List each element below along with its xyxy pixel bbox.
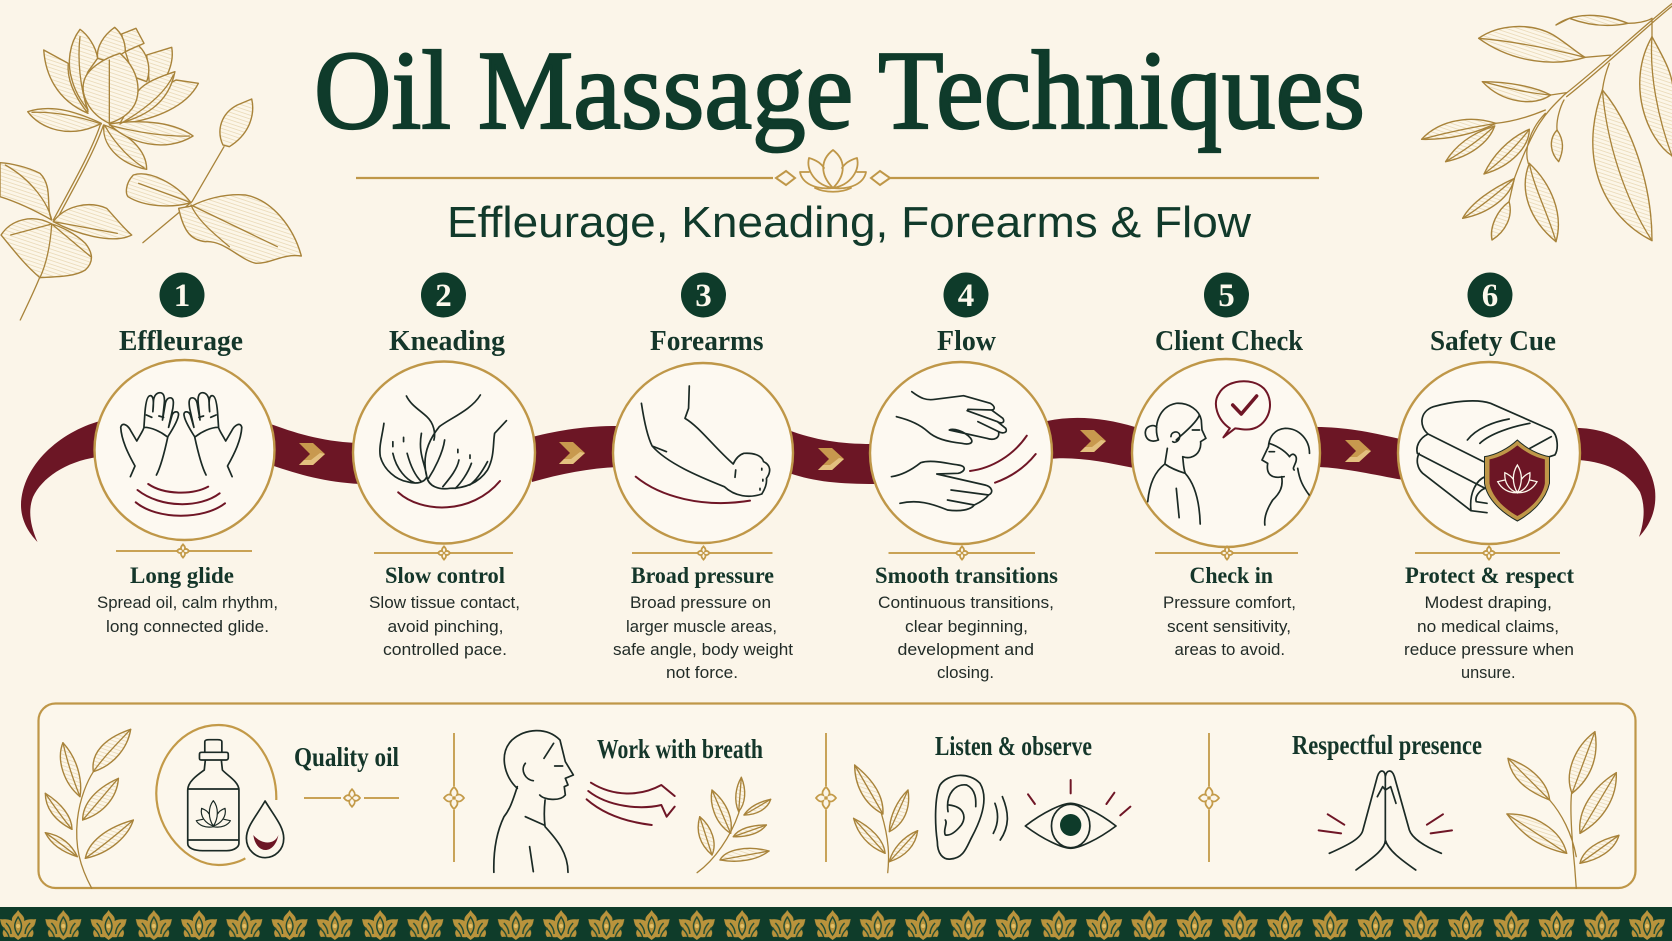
description: clear beginning, [905,617,1028,636]
heading: Kneading [389,326,505,357]
number badge 1: 1 [174,278,190,314]
step 6: Safety Cue [1398,272,1580,682]
icon: left sprig [45,729,133,888]
heading: Flow [937,326,997,357]
subheading: Check in [1190,563,1273,588]
description: safe angle, body weight [613,640,793,659]
icon: forearm and fist [636,386,770,503]
ribbon chevron arrows [299,430,1371,470]
number badge 3: 3 [695,278,712,314]
description: Slow tissue contact, [369,593,520,612]
subheading: Broad pressure [631,563,774,588]
icon: right sprig [1507,732,1619,888]
description [613,593,793,682]
decoration: lotus illustration [0,27,301,320]
description [878,593,1054,682]
divider [632,546,772,560]
circle [94,360,274,540]
icon: sprig [697,777,771,873]
description: closing. [937,663,994,682]
icon: ear and eye [936,775,1130,859]
description: larger muscle areas, [626,617,777,636]
heading: Forearms [650,326,764,357]
step 2: Kneading [353,272,535,659]
subheading: Smooth transitions [875,563,1058,588]
number badge 6: 6 [1482,278,1498,314]
circle [870,362,1052,544]
icon: towels and shield [1417,401,1557,521]
description: no medical claims, [1417,617,1559,636]
description: long connected glide. [106,617,269,636]
description [1404,593,1574,682]
step 4: Flow [870,272,1058,682]
description: Pressure comfort, [1163,593,1296,612]
number badge 6 [1468,272,1512,318]
icon: sprig [854,765,918,873]
description [1163,593,1296,659]
number badge 2 [421,272,466,318]
decoration: leafy branch [1422,3,1672,242]
icon: oil bottle and drop [156,725,284,865]
step 5: Client Check [1132,272,1320,659]
subheading: Long glide [130,563,234,588]
ribbon connecting the steps [21,418,1655,542]
title: Oil Massage Techniques [314,29,1365,153]
icon: praying hands [1319,771,1452,870]
description: avoid pinching, [388,617,504,636]
divider [1415,546,1560,560]
footer ornamental band [0,907,1672,941]
icon: two people and check bubble [1145,381,1309,525]
title divider with lotus [356,150,1319,192]
number badge 4: 4 [958,278,974,314]
label: listen and observe: Listen & observe [935,731,1092,761]
number badge 2: 2 [435,278,452,314]
subtitle: Effleurage, Kneading, Forearms & Flow [447,198,1251,247]
label: respectful presence: Respectful presence [1292,730,1482,760]
description: Continuous transitions, [878,593,1054,612]
divider [1155,546,1298,560]
description: reduce pressure when [1404,640,1574,659]
label: quality oil: Quality oil [294,742,399,772]
icon: flowing hands [891,392,1036,511]
number badge 1 [160,272,204,318]
step 3: Forearms [613,272,793,682]
circle [353,362,535,544]
description [97,593,278,636]
description: development and [898,640,1034,659]
number badge 4 [944,272,988,318]
circle [1132,359,1320,547]
description: Modest draping, [1424,593,1552,612]
description: areas to avoid. [1174,640,1285,659]
panel: practice tips [38,704,1636,888]
circle [613,363,793,543]
icon: person breathing [494,731,675,872]
description [369,593,520,659]
divider [888,546,1035,560]
separators [444,733,1219,862]
description: Broad pressure on [630,593,771,612]
heading: Effleurage [119,326,243,357]
small divider [304,789,399,807]
subheading: Protect & respect [1405,563,1574,588]
divider [374,546,513,560]
number badge 3 [681,272,726,318]
description: scent sensitivity, [1167,617,1291,636]
divider [116,544,252,558]
number badge 5: 5 [1218,278,1235,314]
heading: Safety Cue [1430,326,1556,357]
icon: open hands [121,393,242,516]
description: controlled pace. [383,640,507,659]
heading: Client Check [1155,326,1303,357]
icon: kneading hands [380,395,506,507]
description: Spread oil, calm rhythm, [97,593,278,612]
step 1: Effleurage [94,272,278,636]
circle [1398,362,1580,544]
number badge 5 [1204,272,1249,318]
description: not force. [666,663,738,682]
label: work with breath: Work with breath [597,734,763,764]
subheading: Slow control [385,563,505,588]
description: unsure. [1461,663,1516,682]
